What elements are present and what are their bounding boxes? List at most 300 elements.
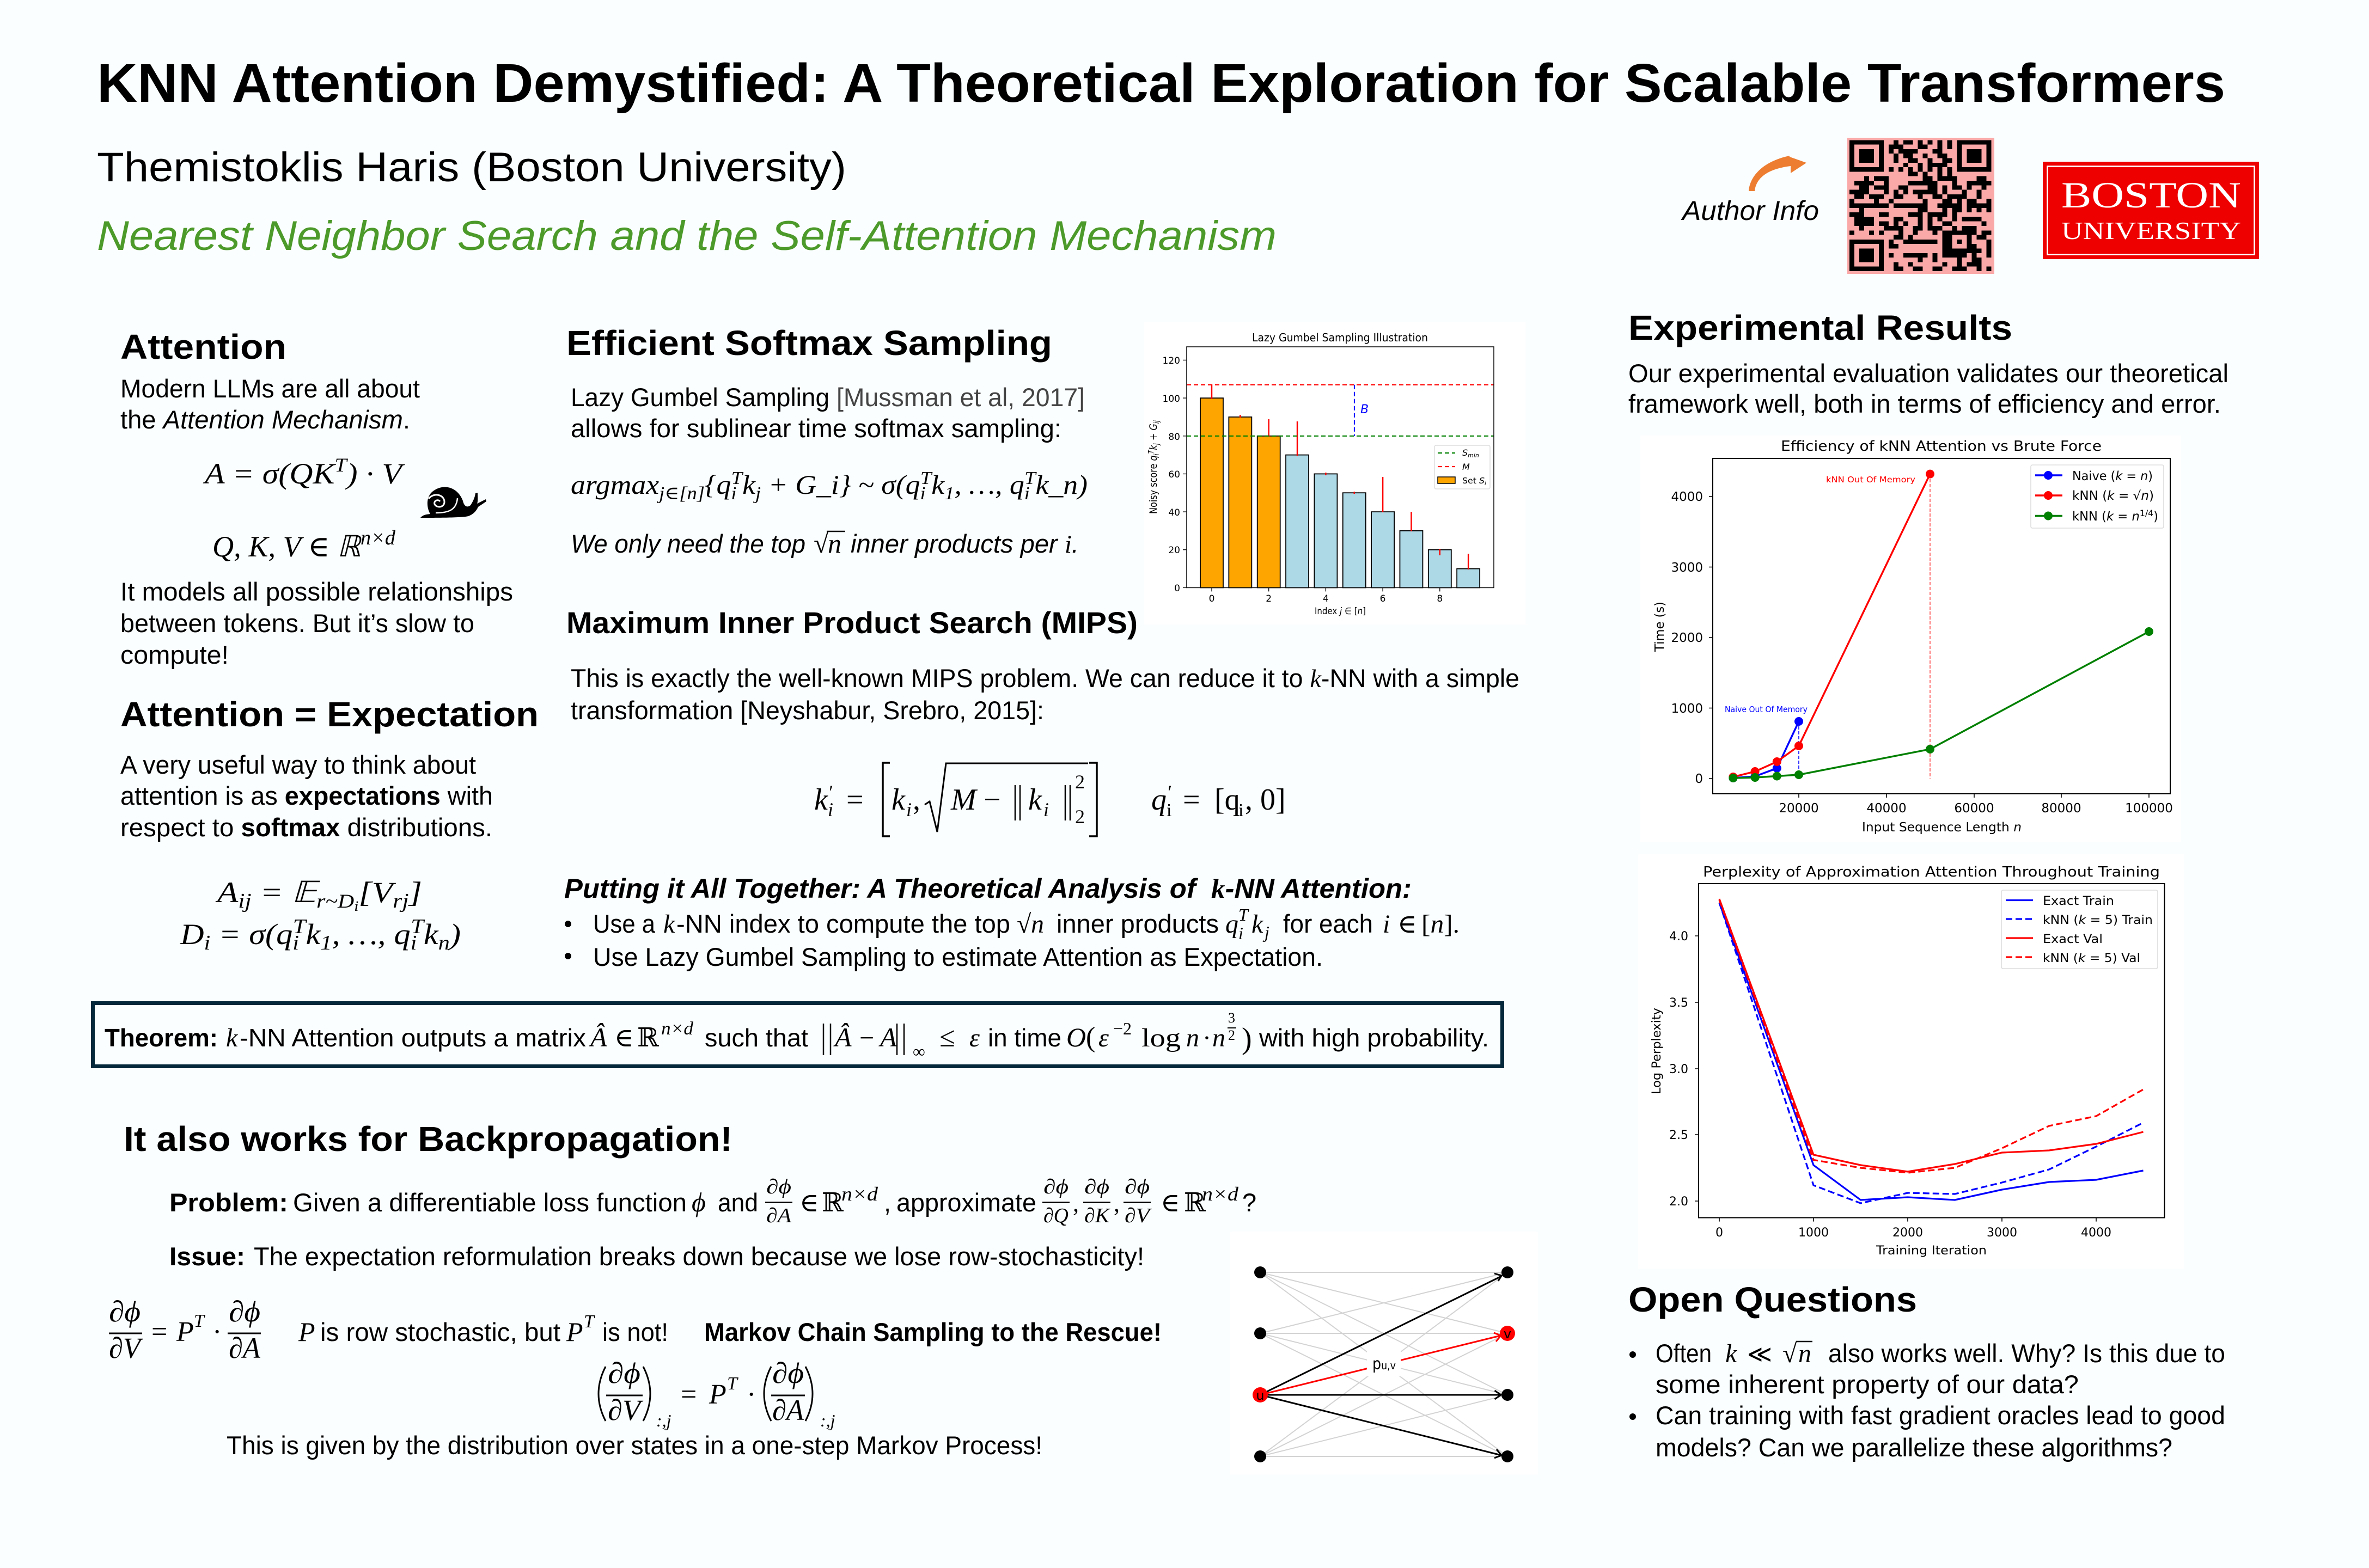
text: row stochastic note: P — [566, 1316, 583, 1347]
node u: u — [1256, 1388, 1265, 1403]
x axis label: Training Iteration — [1876, 1244, 1987, 1258]
x tick labels: 20000 — [1779, 801, 1819, 816]
text: problem statement: , — [884, 1188, 891, 1217]
formula: gradient product: = — [151, 1316, 167, 1347]
callout: theorem: A — [878, 1022, 897, 1052]
x tick labels: 4 — [1323, 593, 1329, 604]
series: naive — [1729, 717, 1803, 782]
formula: q prime: [q — [1214, 783, 1240, 817]
series: exact train — [1719, 903, 2144, 1200]
formula: gradient product: ∂ϕ — [109, 1295, 141, 1328]
legend: S — [1462, 448, 1468, 458]
bullet 1: -NN index to compute the top — [676, 909, 1010, 938]
icon: snail — [420, 487, 486, 518]
text: problem statement: , — [1073, 1190, 1079, 1217]
formula: attention definition: A = σ(QK — [205, 457, 322, 490]
callout: theorem: k — [226, 1024, 239, 1052]
text: slow to compute: between tokens. But it’s slow to — [120, 609, 474, 638]
x tick labels: 0 — [1209, 593, 1214, 604]
formula: q prime: i — [1167, 800, 1171, 820]
plot frame — [1709, 458, 2170, 798]
formula: argmax: , …, q — [954, 469, 1024, 500]
Boston University logo: UNIVERSITY — [2061, 217, 2241, 244]
y tick labels: 3000 — [1671, 561, 1703, 575]
x tick labels: 2 — [1266, 593, 1272, 604]
text: experimental summary: framework well, both in terms of efficiency and error. — [1628, 389, 2221, 418]
formula: k prime: ′ — [828, 781, 833, 803]
formula: argmax: 1 — [944, 483, 954, 504]
callout: theorem: ∞ — [913, 1042, 925, 1061]
text: problem statement: ∈ — [799, 1189, 819, 1217]
x tick labels: 6 — [1380, 593, 1386, 604]
text: lazy gumbel: [Mussman et al, 2017] — [837, 383, 1085, 412]
bullet: why small k works: Often — [1656, 1339, 1712, 1368]
text: MIPS reduction: transformation [Neyshabur, Srebro, 2015]: — [571, 696, 1044, 725]
panel: efficient softmax sampling — [566, 323, 1088, 559]
callout: theorem: −2 — [1113, 1019, 1132, 1038]
heading: experimental results: Experimental Results — [1628, 308, 2012, 347]
QR code — [1847, 138, 1994, 274]
legend — [2031, 465, 2164, 528]
y tick labels: 2.0 — [1669, 1195, 1688, 1209]
formula: q prime: = — [1183, 783, 1200, 817]
formula: argmax: {q — [705, 469, 731, 500]
text: lazy gumbel: Lazy Gumbel Sampling — [571, 383, 829, 412]
formula: k prime: − — [984, 783, 1001, 817]
y axis label: Log Perplexity — [1650, 1008, 1664, 1094]
formula: k prime: i — [906, 799, 912, 820]
text: problem statement: and — [718, 1188, 758, 1217]
y axis label: k — [1147, 444, 1159, 450]
bullet: gradient oracles: Can training with fast gradient oracles lead to good — [1656, 1401, 2225, 1430]
formula: expectation: = 𝔼 — [252, 876, 321, 909]
axes — [1183, 347, 1494, 591]
text: issue statement: The expectation reformulation breaks down because we lose row-stochasticity! — [254, 1242, 1144, 1271]
bullet 1: k — [663, 910, 676, 939]
formula: softmax distribution: i — [411, 932, 417, 954]
callout: theorem: − — [859, 1024, 874, 1052]
formula: softmax distribution: = σ(q — [210, 918, 292, 951]
text: expectation description — [120, 750, 493, 842]
legend — [1434, 445, 1490, 489]
text: expectation description: A very useful way to think about — [120, 750, 476, 779]
formula: column-wise gradient — [599, 1357, 835, 1430]
text: row stochastic note — [298, 1312, 668, 1347]
out of memory markers — [1799, 474, 1930, 779]
text: intro: Modern LLMs are all about — [120, 374, 420, 403]
x tick labels — [1209, 593, 1443, 604]
formula: argmax: k — [931, 469, 945, 500]
formula: attention definition: T — [334, 454, 349, 476]
series: knn sqrt n — [1729, 470, 1934, 781]
icon: orange arrow — [1749, 156, 1806, 191]
y tick labels: 0 — [1695, 772, 1703, 786]
formula: k prime: 2 — [1075, 771, 1085, 793]
node u — [1253, 1387, 1268, 1403]
series: knn n^1/4 — [1729, 627, 2153, 782]
callout: theorem: 3 — [1228, 1010, 1235, 1026]
x tick labels: 4000 — [2081, 1226, 2111, 1240]
text: problem statement: ∂ϕ — [1125, 1175, 1150, 1198]
formula: gradient product: ∂ϕ — [229, 1295, 260, 1328]
y tick labels: 4.0 — [1669, 930, 1688, 944]
formula: expectation: ij — [238, 890, 252, 912]
text: experimental summary — [1628, 359, 2228, 418]
callout: theorem: ) — [1242, 1022, 1252, 1056]
bullet: why small k works: some inherent property of our data? — [1656, 1370, 2079, 1399]
formula: expectation: ] — [407, 876, 422, 909]
legend: i — [1485, 481, 1486, 487]
callout: theorem — [93, 1003, 1502, 1066]
text: slow to compute — [120, 577, 513, 669]
y tick labels: 60 — [1168, 469, 1180, 480]
legend: Exact Val — [2043, 933, 2103, 946]
callout: theorem: n×d — [661, 1019, 694, 1039]
legend: 1/4 — [2140, 508, 2153, 518]
bound label B: B — [1360, 403, 1369, 416]
bullet 1: ∈ — [1397, 910, 1417, 939]
chart title: Efficiency of kNN Attention vs Brute Force — [1781, 438, 2102, 455]
x tick labels: 80000 — [2041, 801, 2081, 816]
y tick labels: 20 — [1168, 545, 1180, 556]
edge label — [1367, 1349, 1401, 1376]
formula: k prime: 2 — [1075, 806, 1085, 828]
formula: softmax distribution: , …, q — [332, 918, 411, 951]
bars: remaining scores — [1286, 455, 1480, 587]
formula: softmax distribution: ) — [448, 918, 461, 951]
series: exact val — [1719, 899, 2144, 1172]
text: MIPS reduction: This is exactly the well-known MIPS problem. We can reduce it to k-NN with a simple — [571, 664, 1519, 693]
formula: softmax distribution: n — [438, 932, 450, 954]
formula: softmax distribution: D — [180, 918, 202, 951]
x tick labels: 100000 — [2125, 801, 2173, 816]
x axis label: Index j ∈ [n] — [1315, 606, 1366, 617]
text: top sqrt n inner products: n — [828, 528, 841, 559]
y tick labels — [1669, 930, 1688, 1209]
x tick labels: 8 — [1437, 593, 1443, 604]
text: problem statement: ∂A — [766, 1204, 792, 1227]
y tick labels: 1000 — [1671, 702, 1703, 716]
callout: theorem: ℝ — [637, 1024, 659, 1052]
formula: softmax distribution: i — [292, 932, 299, 954]
formula: k prime: i — [1043, 799, 1049, 820]
panel: MIPS — [566, 605, 1519, 836]
black arrows — [1260, 1273, 1501, 1458]
panel: open questions — [1628, 1280, 2225, 1462]
formula: gradient product — [109, 1295, 261, 1364]
y tick labels: 120 — [1163, 356, 1180, 366]
formula: softmax distribution: T — [293, 915, 308, 938]
callout: theorem: in time — [988, 1024, 1061, 1052]
formula: k prime: k — [1028, 783, 1042, 817]
legend: kNN (k = n — [2072, 510, 2140, 524]
formula: q prime: ′ — [1167, 781, 1171, 803]
panel: attention — [120, 327, 513, 669]
text: row stochastic note: is not! — [602, 1318, 668, 1346]
text: problem statement: ∂K — [1084, 1204, 1110, 1227]
panel: lazy gumbel chart — [1144, 322, 1525, 624]
bullet: gradient oracles: models? Can we parallelize these algorithms? — [1656, 1433, 2172, 1462]
bullet: why small k works: √ — [1782, 1339, 1797, 1368]
bullet 1: [n]. — [1421, 910, 1460, 939]
panel: backpropagation — [109, 1119, 1256, 1460]
formula: column-wise gradient: T — [727, 1374, 738, 1394]
text: row stochastic note: T — [584, 1312, 595, 1332]
formula: gradient product: ∂V — [109, 1332, 144, 1364]
subheading: Putting it All Together: A Theoretical Analysis of k-NN Attention: — [564, 873, 1412, 904]
legend: Exact Train — [2043, 895, 2114, 908]
text: problem statement: ϕ — [692, 1187, 706, 1217]
y tick labels: 40 — [1168, 507, 1180, 518]
callout: theorem: ( — [1086, 1022, 1095, 1053]
y axis label: G — [1147, 424, 1159, 431]
y tick labels — [1671, 490, 1703, 786]
text: problem statement: n×d — [1202, 1183, 1239, 1205]
text: row stochastic note: P — [298, 1316, 315, 1347]
x tick labels: 0 — [1715, 1226, 1723, 1240]
formula: argmax: j — [753, 483, 761, 504]
panel: attention = expectation — [120, 695, 539, 954]
bullet 1: i — [1383, 910, 1390, 939]
formula: gradient product: ∂A — [229, 1332, 261, 1364]
formula: matrix domain: Q, K, V ∈ ℝ — [212, 530, 360, 563]
y tick labels: 3.5 — [1669, 996, 1688, 1010]
bullet 2: Use Lazy Gumbel Sampling to estimate Attention as Expectation. — [593, 942, 1323, 971]
series: knn val — [1719, 900, 2144, 1173]
formula: q prime: q — [1151, 783, 1167, 817]
legend — [2001, 890, 2158, 969]
formula: gradient product: T — [194, 1311, 205, 1331]
callout: theorem: ≤ — [939, 1022, 955, 1053]
background edges — [1260, 1272, 1507, 1456]
formula: column-wise gradient: · — [747, 1379, 756, 1410]
text: slow to compute: It models all possible relationships — [120, 577, 513, 606]
text: expectation description: attention is as expectations with — [120, 781, 493, 810]
bars: set S_i — [1200, 398, 1280, 587]
formula: softmax distribution: k — [306, 918, 321, 951]
formula: argmax: k_n) — [1036, 469, 1088, 500]
formula: column-wise gradient: = — [681, 1379, 697, 1410]
text: problem statement: , — [1114, 1190, 1120, 1217]
x tick labels: 1000 — [1798, 1226, 1829, 1240]
y tick labels: 2.5 — [1669, 1129, 1688, 1142]
formula: column-wise gradient: :,j — [820, 1411, 835, 1430]
text: slow to compute: compute! — [120, 640, 229, 669]
callout: theorem: ε — [1098, 1024, 1109, 1052]
formula: argmax: i — [731, 483, 736, 504]
legend: kNN (k = 5) Train — [2043, 914, 2153, 927]
text: markov process: This is given by the distribution over states in a one-step Markov Process! — [227, 1431, 1042, 1460]
formula: softmax distribution: T — [411, 915, 425, 938]
callout: theorem: with high probability. — [1259, 1024, 1489, 1052]
chart title: Perplexity of Approximation Attention Throughout Training — [1703, 864, 2160, 880]
bullet: why small k works: n — [1798, 1339, 1811, 1368]
annotation: naive out of memory: Naive Out Of Memory — [1725, 705, 1808, 714]
red arrow — [1260, 1333, 1501, 1395]
chart: efficiency — [1640, 436, 2181, 842]
chart: perplexity — [1638, 854, 2184, 1269]
x axis label: Input Sequence Length n — [1862, 820, 2022, 835]
heading: backpropagation: It also works for Backpropagation! — [124, 1119, 732, 1159]
bullet: why small k works: k — [1725, 1339, 1738, 1368]
bullet 1: i — [1238, 923, 1243, 943]
y tick labels: 80 — [1168, 432, 1180, 443]
text: expectation description: respect to softmax distributions. — [120, 813, 492, 842]
text: problem statement: ? — [1242, 1188, 1256, 1217]
formula: argmax: i — [1024, 483, 1030, 504]
formula: gradient product: P — [176, 1316, 194, 1347]
formula: gradient product: · — [212, 1316, 222, 1347]
legend: kNN (k = √n) — [2072, 489, 2154, 503]
y axis label: Time (s) — [1653, 602, 1667, 652]
callout: theorem: n — [1186, 1024, 1199, 1052]
x tick labels: 2000 — [1892, 1226, 1923, 1240]
formula: argmax: T — [731, 468, 743, 488]
formula: softmax distribution: 1 — [320, 932, 332, 954]
formula: argmax: T — [1024, 468, 1037, 488]
text: top sqrt n inner products — [571, 528, 1079, 559]
text: row stochastic note: is row stochastic, but — [320, 1318, 560, 1346]
formula: expectation: r~D — [316, 890, 354, 912]
plot frame — [1695, 884, 2164, 1222]
formula: expectation: [V — [359, 876, 396, 909]
formula: argmax: argmax — [571, 469, 653, 500]
y axis label: T — [1147, 450, 1156, 454]
heading: attention = expectation: Attention = Expectation — [120, 695, 539, 734]
x tick labels: 40000 — [1866, 801, 1907, 816]
Boston University logo — [2043, 162, 2259, 259]
x tick labels: 3000 — [1987, 1226, 2017, 1240]
formula: softmax distribution: k — [424, 918, 439, 951]
formula: column-wise gradient: :,j — [656, 1411, 671, 1430]
author info block — [1681, 156, 1819, 226]
text: problem statement: ℝ — [822, 1189, 844, 1217]
formula: column-wise gradient: ∂A — [772, 1394, 804, 1426]
text: problem statement: ∂ϕ — [1043, 1175, 1069, 1198]
text: problem statement: ∂ϕ — [1084, 1175, 1109, 1198]
formula: column-wise gradient: ∂ϕ — [608, 1357, 640, 1389]
callout: theorem: ε — [969, 1024, 980, 1052]
author: Themistoklis Haris (Boston University) — [97, 144, 846, 191]
callout: theorem: O — [1066, 1022, 1086, 1052]
text: problem statement: Problem: — [169, 1188, 288, 1217]
callout: theorem: ∈ — [614, 1024, 634, 1052]
formula: column-wise gradient: P — [709, 1379, 726, 1410]
formula: attention definition: ) — [345, 457, 358, 490]
diagram: markov transition graph — [1230, 1232, 1538, 1474]
text: problem statement: approximate — [896, 1188, 1036, 1217]
x tick labels: 60000 — [1954, 801, 1994, 816]
annotation: knn out of memory: kNN Out Of Memory — [1826, 475, 1915, 485]
edge label: pu,v — [1372, 1355, 1396, 1373]
nodes — [1254, 1266, 1513, 1462]
legend: M — [1462, 462, 1470, 472]
y axis label: i — [1153, 454, 1161, 455]
text: lazy gumbel — [571, 383, 1085, 443]
formula: argmax: T — [920, 468, 933, 488]
y tick labels: 2000 — [1671, 631, 1703, 645]
legend: Set S — [1462, 476, 1485, 486]
formula: attention definition: · V — [358, 457, 406, 490]
heading: MIPS: Maximum Inner Product Search (MIPS) — [566, 605, 1138, 640]
bullet: why small k works: also works well. Why? Is this due to — [1828, 1339, 2225, 1368]
bullet 1 — [565, 905, 1460, 943]
chart title: Lazy Gumbel Sampling Illustration — [1252, 331, 1428, 344]
text: intro: the Attention Mechanism. — [120, 405, 410, 434]
formula: matrix domain: n×d — [361, 526, 396, 549]
formula: argmax: k — [742, 469, 756, 500]
bullet 1: √ — [1017, 910, 1031, 939]
formula: expectation: rj — [393, 890, 409, 912]
text: markov chain sampling: Markov Chain Sampling to the Rescue! — [704, 1318, 1162, 1346]
bullet 1: T — [1238, 905, 1249, 924]
callout: theorem: Â — [589, 1022, 607, 1052]
text: issue statement: Issue: — [169, 1242, 245, 1271]
legend: kNN (k = 5) Val — [2043, 952, 2140, 965]
x tick labels — [1779, 801, 2173, 816]
bullet 1: k — [1251, 910, 1264, 939]
callout: theorem: such that — [705, 1024, 808, 1052]
bullet: gradient oracles — [1629, 1401, 2225, 1462]
bullet 1: q — [1225, 910, 1238, 939]
text: top sqrt n inner products: inner products per i. — [851, 529, 1079, 559]
y tick labels: 4000 — [1671, 490, 1703, 504]
formula: q prime: , 0] — [1245, 783, 1286, 817]
heading: open questions: Open Questions — [1628, 1280, 1917, 1319]
formula: k prime: , — [913, 783, 920, 817]
y axis label: ij — [1153, 420, 1161, 424]
formula: column-wise gradient: ∂ϕ — [772, 1357, 804, 1389]
formula: softmax distribution: i — [204, 932, 210, 954]
node v — [1500, 1326, 1515, 1342]
bullet 1: for each — [1283, 909, 1373, 938]
formula: expectation: i — [354, 898, 359, 914]
subtitle: Nearest Neighbor Search and the Self-Attention Mechanism — [97, 213, 1277, 259]
text: top sqrt n inner products: We only need the top — [571, 529, 805, 558]
callout: theorem: -NN Attention outputs a matrix — [240, 1024, 586, 1052]
formula: argmax: j∈[n] — [657, 483, 705, 504]
callout: theorem: Â — [833, 1022, 852, 1052]
callout: theorem: · — [1202, 1024, 1211, 1052]
y tick labels — [1163, 356, 1180, 594]
Boston University logo: BOSTON — [2061, 174, 2241, 216]
formula: q prime: i — [1238, 800, 1243, 820]
series: knn train — [1719, 903, 2144, 1203]
y axis label: j — [1153, 443, 1161, 446]
bullet 1: Use a — [593, 909, 656, 938]
text: problem statement: n×d — [841, 1183, 878, 1205]
formula: k prime: k — [814, 783, 828, 817]
node v: v — [1504, 1326, 1511, 1342]
bullet 1: n — [1031, 910, 1044, 939]
author info label: Author Info — [1681, 195, 1819, 226]
legend: min — [1468, 452, 1479, 459]
text: top sqrt n inner products: √ — [814, 528, 829, 559]
text: problem statement: ∂V — [1125, 1204, 1152, 1227]
threshold lines — [1187, 385, 1494, 436]
formula: argmax: i — [920, 483, 926, 504]
bullet: why small k works — [1629, 1339, 2225, 1399]
text: lazy gumbel: allows for sublinear time softmax sampling: — [571, 414, 1061, 443]
y tick labels: 3.0 — [1669, 1063, 1688, 1076]
text: problem statement: ∈ — [1161, 1189, 1180, 1217]
text: experimental summary: Our experimental evaluation validates our theoretical — [1628, 359, 2228, 388]
legend: ) — [2153, 510, 2158, 524]
formula: column-wise gradient: ∂V — [608, 1394, 644, 1426]
gumbel noise error lines — [1212, 384, 1468, 569]
callout: theorem: n — [1212, 1024, 1225, 1052]
formula: expectation: A — [217, 876, 235, 909]
